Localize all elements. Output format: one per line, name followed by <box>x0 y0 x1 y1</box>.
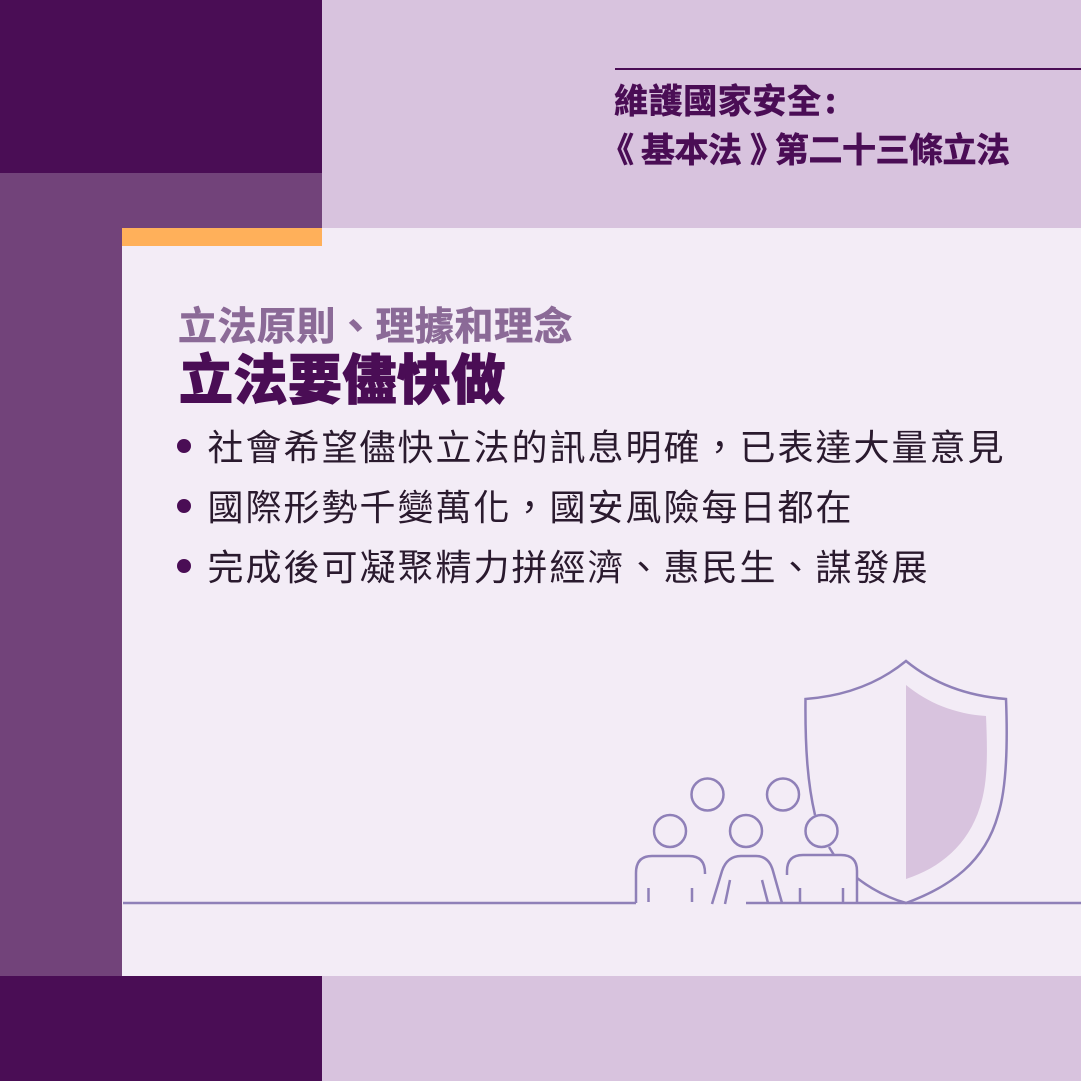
bullet 3: 完成後可凝聚精力拼經濟、惠民生、謀發展 <box>208 539 930 591</box>
icon: people group <box>636 778 857 904</box>
header title: 《 <box>600 123 634 172</box>
main heading: 立法要儘快做 <box>179 336 506 415</box>
ground line <box>123 902 1081 904</box>
header title: 》 <box>750 123 784 172</box>
orange accent bar <box>122 228 322 246</box>
header title <box>600 74 1010 172</box>
bullet list <box>177 419 1006 591</box>
bullet 1: 社會希望儘快立法的訊息明確，已表達大量意見 <box>208 419 1006 471</box>
main content panel <box>122 228 1081 976</box>
icon: shield <box>805 661 1007 903</box>
section subheading: 立法原則、理據和理念 <box>178 296 573 352</box>
background block: top left dark <box>0 0 322 173</box>
bullet 2: 國際形勢千變萬化，國安風險每日都在 <box>208 479 854 531</box>
header title: 基本法 <box>641 123 742 172</box>
header title: : <box>825 74 836 123</box>
header title: 維護國家安全 <box>614 74 822 123</box>
header rule <box>615 68 1081 70</box>
header title: 第二十三條立法 <box>775 123 1010 172</box>
background block: bottom left dark <box>0 976 322 1081</box>
background block: left mid purple <box>0 173 322 976</box>
